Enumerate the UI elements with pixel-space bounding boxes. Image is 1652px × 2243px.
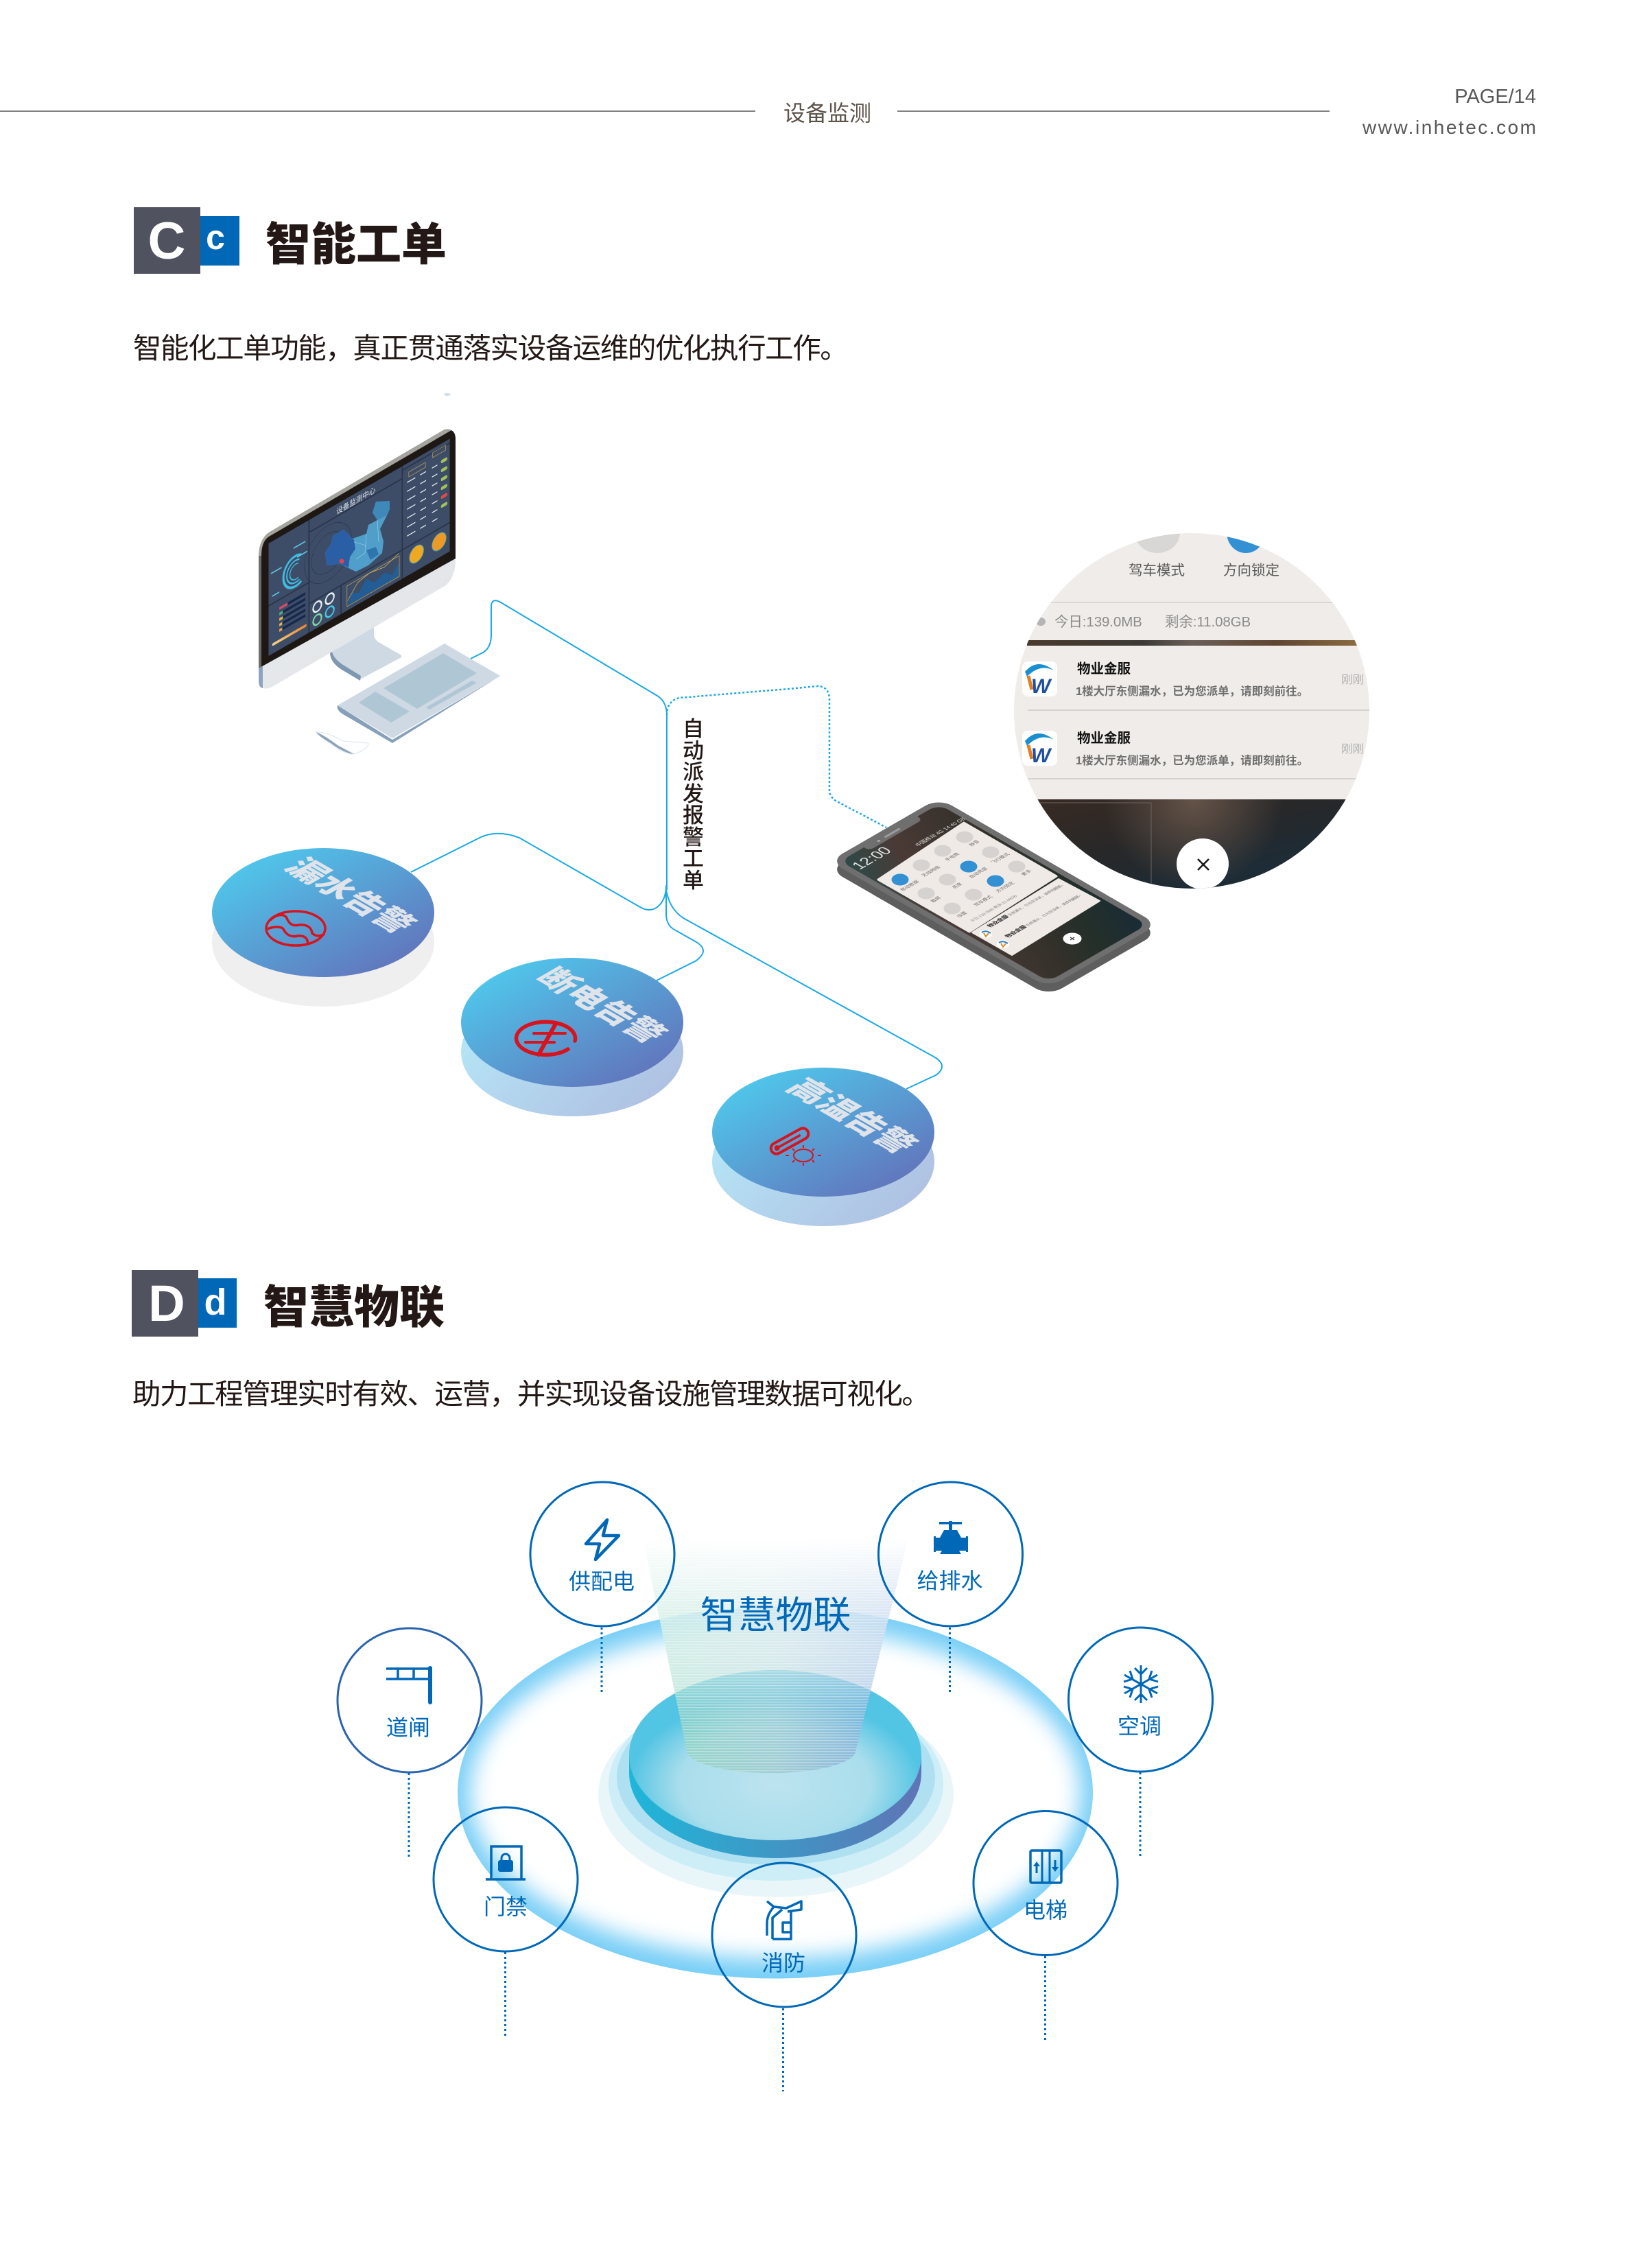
phone notification rows: 物业金服 [985, 914, 1010, 928]
section C heading: 智能工单 [266, 219, 447, 270]
phone notification rows: 物业金服 [1003, 924, 1028, 939]
notification 1: 物业金服 [1077, 661, 1131, 677]
notification 2: 物业金服 [1077, 730, 1131, 746]
icon: power off [517, 1022, 576, 1055]
node: elevator [974, 1811, 1118, 2041]
notification 2: W [1031, 744, 1052, 767]
node: air conditioning [1069, 1628, 1213, 1857]
node: access control: 门禁 [484, 1894, 528, 1919]
notification 1 [1022, 661, 1364, 698]
donut rings [313, 591, 334, 627]
phone notification rows: 1楼大厅东侧漏水，已为您派单，请即刻前往。 [995, 882, 1066, 924]
node: water supply: 给排水 [917, 1569, 983, 1593]
icon: barrier [386, 1668, 430, 1702]
quick setting labels: 无线网络 [920, 865, 942, 878]
ripple rings [598, 1687, 954, 1897]
dark wallpaper [1037, 799, 1346, 889]
alarm label: 高温告警 [779, 1074, 924, 1158]
quick setting labels: 驾车模式 [972, 895, 994, 907]
notification 2: 1楼大厅东侧漏水，已为您派单，请即刻前往。 [1076, 753, 1308, 767]
section C description: 智能化工单功能，真正贯通落实设备运维的优化执行工作。 [133, 332, 847, 364]
icon: thermometer and sun [769, 1126, 821, 1166]
area chart [347, 553, 399, 607]
quick setting labels: 亮度 [950, 882, 964, 889]
monitor [259, 429, 456, 689]
monitor stand [330, 627, 401, 681]
node: power [530, 1482, 674, 1695]
node: fire protection [712, 1863, 856, 2091]
section C heading: C [148, 212, 185, 270]
icon: lock door [486, 1846, 526, 1879]
phone notification rows: 1楼大厅东侧漏水，已为您派单，请即刻前往。 [1013, 893, 1084, 934]
close button [1177, 838, 1229, 889]
quick setting labels: 手电筒 [943, 852, 961, 862]
page number: PAGE/14 [1454, 86, 1536, 108]
phone side [829, 806, 1158, 996]
page header [0, 86, 1536, 138]
quick setting labels [899, 839, 1033, 918]
china map panel rings [304, 512, 352, 594]
phone face [829, 798, 1158, 988]
quick setting labels: 自动亮度 [967, 867, 989, 879]
section D description: 助力工程管理实时有效、运营，并实现设备设施管理数据可视化。 [132, 1378, 929, 1410]
header section name: 设备监测 [783, 101, 871, 126]
icon: elevator doors [1030, 1851, 1061, 1883]
mouse [316, 732, 368, 754]
bar list [272, 591, 307, 646]
data usage row [1037, 615, 1250, 628]
phone close button [1063, 933, 1081, 944]
monitor body [259, 430, 456, 689]
icon: valve [934, 1521, 968, 1554]
connector lines [411, 600, 942, 1089]
alarm: high temperature [712, 1068, 934, 1226]
node: elevator: 电梯 [1024, 1898, 1067, 1923]
phone notification rows: 刚刚 [1052, 884, 1063, 891]
phone notification rows: 刚刚 [1070, 895, 1081, 902]
node: barrier gate: 道闸 [386, 1715, 430, 1740]
quick setting labels: 方向锁定 [994, 881, 1016, 893]
toggle buttons [1137, 534, 1180, 553]
icon: water waves [266, 911, 325, 946]
vertical label: 自动派发报警工单 [683, 717, 704, 893]
quick settings panel [878, 823, 1057, 932]
monitor screen dashboard [269, 439, 450, 656]
divider band [1027, 640, 1357, 646]
section D heading: D [148, 1275, 185, 1332]
quick setting labels: 截屏 [929, 895, 943, 903]
magnified notification circle: 方向锁定 [1223, 563, 1279, 578]
quick setting labels: 设置 [955, 911, 969, 918]
quick setting labels: 移动数据 [899, 880, 921, 892]
notification 1: 1楼大厅东侧漏水，已为您派单，请即刻前往。 [1076, 684, 1308, 698]
status table [407, 465, 437, 537]
phone status: 中国移动 4G 14:40 GB [913, 817, 967, 847]
phone [829, 798, 1158, 996]
toggle labels: 驾车模式 [1129, 563, 1185, 578]
ring chart [271, 540, 308, 600]
section D heading: d [204, 1282, 226, 1323]
section D heading [132, 1270, 445, 1337]
keyboard [338, 644, 500, 743]
section C heading [134, 207, 447, 274]
light beam [643, 1538, 908, 1773]
notification 2: 刚刚 [1341, 742, 1364, 755]
quick setting buttons [892, 832, 1025, 914]
phone clock: 12:00 [848, 844, 895, 872]
quick setting labels: 静音 [967, 839, 981, 847]
diagram title: 智慧物联 [700, 1594, 851, 1636]
quick setting labels: 更多 [1019, 869, 1033, 876]
notification 1: W [1031, 675, 1052, 698]
notification 1: 刚刚 [1341, 673, 1364, 686]
quick setting labels: 飞行模式 [989, 852, 1011, 865]
phone data usage: 今日:139.0MB 剩余:11.08GB [969, 894, 1019, 923]
node: barrier gate [338, 1628, 482, 1857]
data usage row: 剩余:11.08GB [1165, 614, 1251, 630]
icon: bolt [586, 1520, 619, 1560]
outer glow ring [453, 1602, 1098, 1983]
notifications panel [972, 879, 1100, 955]
node: access control [434, 1807, 578, 2036]
icon: snowflake [1124, 1665, 1158, 1703]
orange gauges [410, 528, 446, 567]
node: fire protection: 消防 [762, 1951, 805, 1975]
alarm: power cut [461, 958, 683, 1116]
node: air conditioning: 空调 [1118, 1714, 1161, 1739]
magnified notification circle [1014, 533, 1369, 889]
dashboard title: 设备监测中心 [336, 484, 375, 517]
section C heading: c [206, 218, 225, 257]
section D heading: 智慧物联 [263, 1282, 445, 1332]
small mark [444, 393, 451, 396]
central disc [629, 1670, 921, 1858]
IoT diagram [338, 1482, 1213, 2091]
node: power: 供配电 [569, 1569, 635, 1594]
alarm label: 漏水告警 [277, 854, 423, 938]
node: water supply [878, 1482, 1022, 1693]
china map [325, 501, 390, 572]
phone notification rows [980, 882, 1084, 948]
alarm: water leak [212, 848, 434, 1007]
data usage row: 今日:139.0MB [1054, 614, 1142, 630]
notification 2 [1022, 730, 1364, 767]
icon: fire extinguisher [767, 1901, 801, 1939]
phone screen [836, 802, 1147, 981]
alarm label: 断电告警 [528, 964, 674, 1048]
website: www.inhetec.com [1362, 117, 1536, 138]
